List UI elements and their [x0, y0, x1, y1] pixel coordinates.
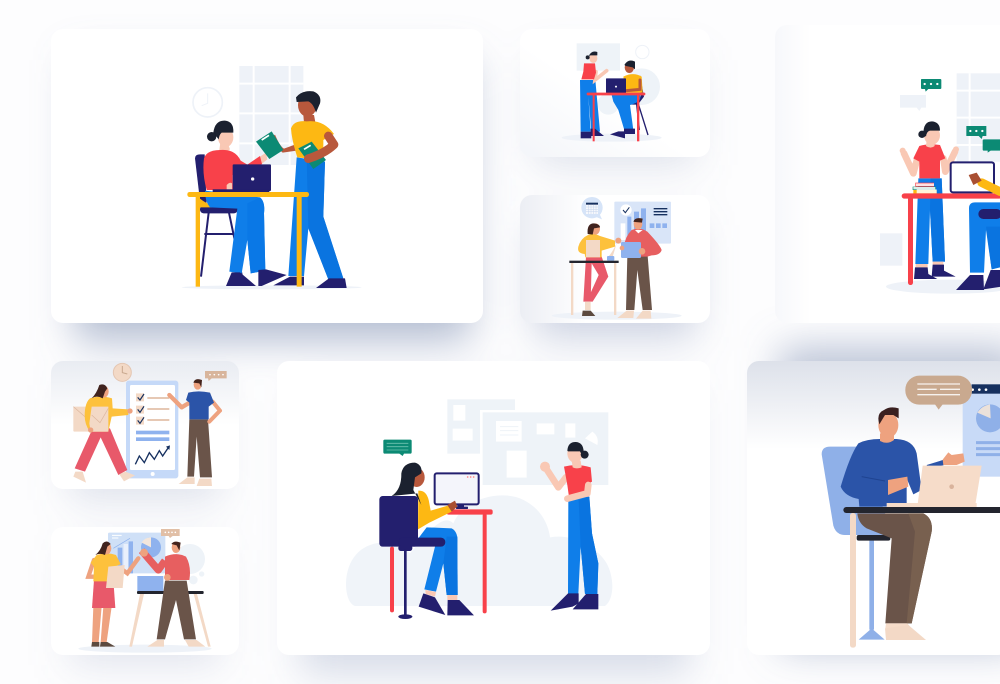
panel: central desk card: [277, 361, 710, 655]
panel: top right card: [775, 25, 1000, 323]
scene: colleagues at red desk: [562, 43, 662, 142]
figure: standing woman: [900, 121, 959, 279]
green speech bubble: [983, 139, 1000, 153]
green speech bubble: [921, 79, 941, 92]
chair: [822, 447, 892, 640]
illustration: central desk conversation: [346, 399, 612, 619]
presentation screen: [963, 384, 1000, 477]
panel: bottom right card: [747, 361, 1000, 655]
chair: [195, 154, 242, 277]
office chair: [379, 496, 445, 619]
illustration: colleagues sharing a folder at a yellow desk: [182, 66, 362, 289]
green speech bubble: [383, 440, 412, 456]
table: [843, 507, 1000, 648]
monitor: [435, 473, 479, 509]
figure: seated woman: [203, 121, 287, 286]
panel: large meeting card: [51, 29, 483, 323]
cloud backdrop: [346, 495, 612, 606]
illustrations: small cards left column: [73, 363, 227, 653]
illustration: top right team at red desk: [880, 73, 1000, 294]
desk: [390, 509, 493, 613]
panel: small analytics card: [520, 195, 710, 323]
panel: checklist card: [51, 361, 239, 489]
icon: wall clock: [193, 88, 222, 117]
laptop: [887, 466, 982, 507]
wall board back: [447, 399, 515, 454]
wall board front: [453, 405, 611, 487]
icon: green folder held: [298, 142, 326, 169]
scene: presentation at table: [78, 529, 212, 653]
green speech bubble: [966, 126, 986, 139]
table: [902, 193, 1000, 285]
figure: seated man: [956, 173, 1000, 290]
icon: laptop screen: [951, 162, 994, 192]
table: [187, 192, 309, 287]
figure: standing woman: [540, 442, 598, 611]
pale wall frame: [880, 233, 902, 266]
icon: stack of books: [913, 183, 937, 194]
icon: window: [239, 66, 303, 165]
icon: laptop: [213, 164, 271, 192]
scene: analytics board discussion: [552, 197, 682, 320]
panel: presentation card: [51, 527, 239, 655]
illustration: man with laptop at dark table: [822, 376, 1000, 648]
illustrations: small cards right column: [552, 43, 682, 320]
figure: seated woman: [392, 463, 474, 615]
icon: green folder in hand: [256, 131, 283, 159]
pale speech bubble: [900, 95, 926, 111]
scene: checklist on phone: [73, 363, 227, 486]
panel: small red desk card: [520, 29, 710, 157]
speech bubble: [905, 376, 972, 410]
man's arm: [308, 136, 334, 159]
figure: standing man: [272, 91, 347, 288]
icon: window: [957, 73, 1000, 162]
figure: seated man: [841, 407, 965, 640]
